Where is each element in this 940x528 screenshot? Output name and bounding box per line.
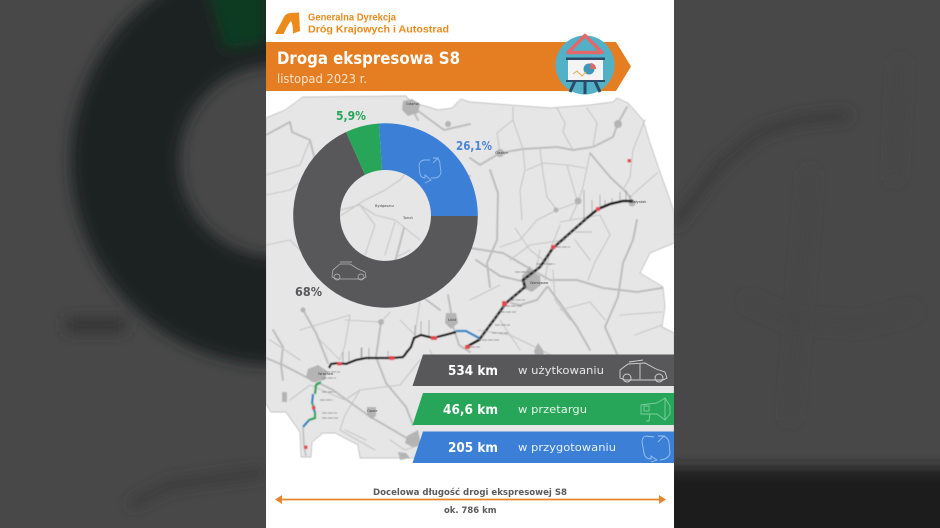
- logo: [275, 12, 449, 36]
- city labels: Toruń: [402, 216, 413, 220]
- legend band: tender: [412, 393, 674, 425]
- city labels: Łódź: [447, 318, 456, 322]
- date: listopad 2023 r.: [277, 72, 367, 86]
- city labels: Opole: [367, 409, 378, 413]
- city labels: Bydgoszcz: [375, 204, 394, 208]
- institution name: [308, 12, 449, 36]
- city blobs: [282, 99, 636, 460]
- city labels: Wrocław: [318, 372, 333, 376]
- total length heading: Docelowa długość drogi ekspresowej S8: [373, 487, 567, 498]
- S8 route in tender: [309, 382, 321, 420]
- title banner: [266, 42, 631, 91]
- icon: arrows on donut: [419, 158, 441, 183]
- map land shape: [266, 96, 674, 458]
- total length value: ok. 786 km: [444, 506, 496, 516]
- value: 205 km: [448, 441, 498, 456]
- label 26,1%: 26,1%: [456, 138, 492, 153]
- S8 route in use: [329, 332, 456, 368]
- institution name: Dróg Krajowych i Autostrad: [308, 24, 449, 36]
- segment: preparation 26,1%: [379, 123, 478, 216]
- icon: arrows: [642, 436, 670, 462]
- label 5,9%: 5,9%: [336, 108, 366, 123]
- icon: megaphone: [641, 398, 670, 421]
- title: Droga ekspresowa S8: [277, 49, 460, 68]
- label 68%: 68%: [295, 284, 322, 299]
- S8 route in preparation: [456, 331, 479, 338]
- panel: donut chart: [293, 108, 492, 308]
- city labels: [318, 102, 647, 413]
- arrow: total length: [275, 495, 666, 504]
- icon: car on donut: [332, 262, 366, 280]
- description: w przetargu: [518, 404, 587, 416]
- legend band: preparation: [412, 432, 674, 463]
- city labels: Białystok: [630, 200, 647, 204]
- icon: car: [620, 360, 667, 382]
- icon: presentation board: [556, 36, 614, 94]
- description: w przygotowaniu: [518, 442, 616, 454]
- route tick labels: [343, 190, 630, 364]
- city labels: Gdańsk: [406, 102, 420, 106]
- value: 46,6 km: [443, 403, 498, 418]
- description: w użytkowaniu: [518, 365, 604, 377]
- city labels: Olsztyn: [495, 151, 508, 155]
- segment: tender 5,9%: [346, 124, 382, 175]
- gray road continuation: [303, 427, 306, 456]
- city labels: Warszawa: [530, 281, 548, 285]
- road network: [266, 105, 662, 440]
- icon: GDDKiA road mark: [275, 12, 300, 34]
- legend band: in use: [412, 354, 674, 386]
- value: 534 km: [448, 364, 498, 379]
- white page: [266, 0, 674, 528]
- segment: in use 68%: [293, 132, 478, 308]
- institution name: Generalna Dyrekcja: [308, 12, 396, 24]
- red markers: [304, 159, 631, 449]
- panel: map of Poland: [266, 96, 674, 460]
